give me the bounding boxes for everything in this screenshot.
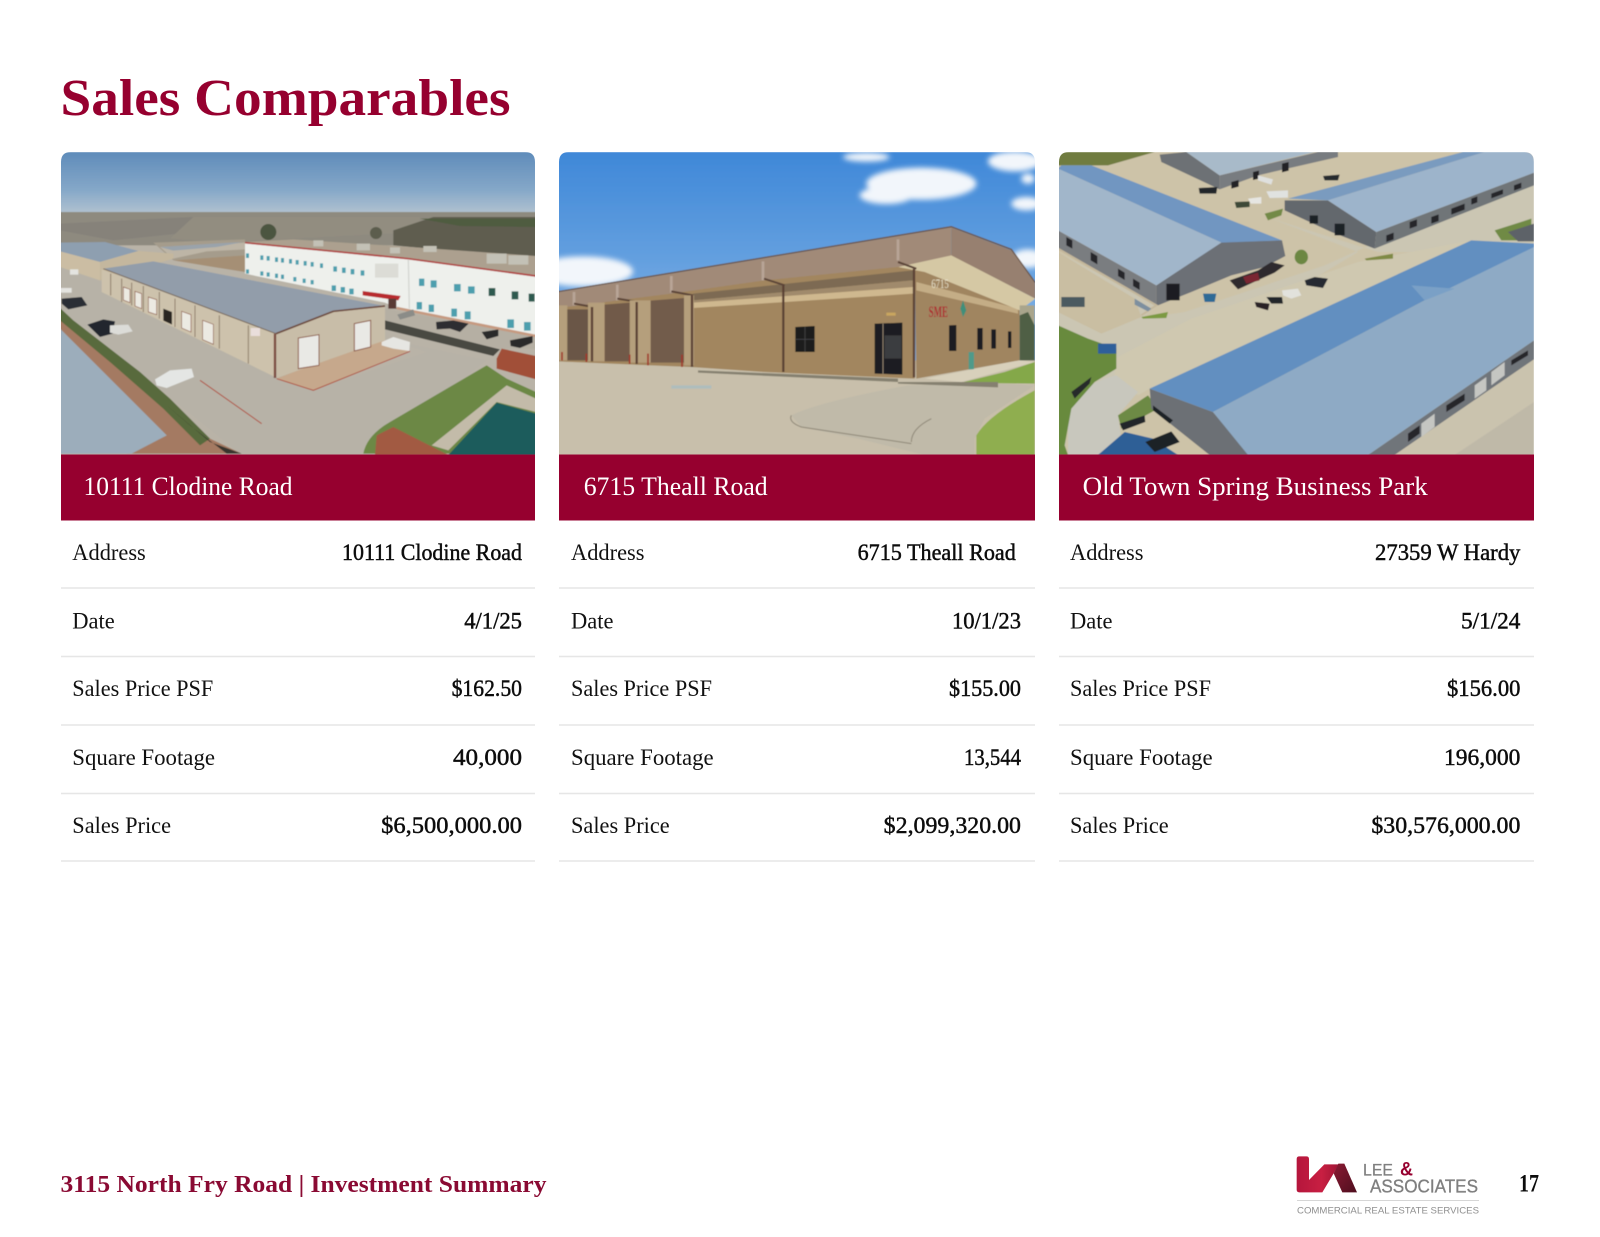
row: address: Address bbox=[1070, 540, 1144, 565]
logo: Lee &amp; Associates bbox=[1297, 1156, 1479, 1216]
parked cars bbox=[1230, 262, 1285, 289]
row: square footage bbox=[61, 745, 535, 794]
row: sales price: $6,500,000.00 bbox=[381, 813, 522, 838]
row: address bbox=[1059, 540, 1534, 588]
pavement bbox=[556, 360, 1036, 455]
logo wordmark: LEE bbox=[1363, 1160, 1393, 1180]
row: date: 10/1/23 bbox=[952, 608, 1021, 633]
panel: comparable 1 bbox=[60, 152, 536, 861]
white building bbox=[245, 239, 536, 276]
row: address: Address bbox=[571, 540, 645, 565]
soffit bbox=[898, 255, 1035, 310]
roof D bbox=[1150, 389, 1250, 455]
row: sales price psf: $155.00 bbox=[949, 676, 1021, 701]
ground bands bbox=[385, 309, 536, 349]
photo: 10111 Clodine Road warehouse aerial bbox=[60, 152, 536, 455]
blue shade and trees bbox=[1098, 432, 1178, 455]
tan pad bbox=[277, 340, 410, 390]
row: sales price: Sales Price bbox=[571, 813, 670, 838]
row: sales price bbox=[559, 813, 1035, 861]
footer title: 3115 North Fry Road | Investment Summary bbox=[60, 1171, 547, 1198]
roof A walls bbox=[1058, 230, 1156, 306]
row: address bbox=[61, 540, 535, 588]
photo: Old Town Spring Business Park aerial bbox=[1058, 152, 1534, 455]
piers and roll doors bbox=[556, 295, 694, 365]
row: sales price: $2,099,320.00 bbox=[884, 813, 1021, 838]
banner: Old Town Spring Business Park bbox=[1059, 454, 1534, 520]
row: sales price psf bbox=[61, 676, 535, 725]
row: sales price: Sales Price bbox=[72, 813, 171, 838]
row: date: Date bbox=[571, 608, 614, 633]
row: sales price psf: $162.50 bbox=[452, 676, 522, 701]
row: square footage: 40,000 bbox=[453, 745, 522, 770]
left background building bbox=[60, 242, 138, 262]
banner: Old Town Spring Business Park: Old Town Spring Business Park bbox=[1083, 472, 1428, 501]
shrubs and islands bbox=[1295, 250, 1308, 264]
main warehouse walls bbox=[102, 269, 275, 377]
row: sales price psf: Sales Price PSF bbox=[1070, 676, 1211, 701]
row: sales price bbox=[61, 813, 535, 861]
row: date bbox=[559, 608, 1035, 656]
row: date: 4/1/25 bbox=[464, 608, 522, 633]
roof A bbox=[1058, 165, 1282, 243]
row: date bbox=[61, 608, 535, 656]
lower left roof, embankment bbox=[60, 308, 242, 454]
row: sales price psf: Sales Price PSF bbox=[571, 676, 712, 701]
page number: 17 bbox=[1519, 1171, 1539, 1198]
row: square footage: Square Footage bbox=[72, 745, 215, 770]
photo: 6715 Theall Road brick warehouse: 6715 bbox=[931, 277, 949, 291]
banner: 6715 Theall Road: 6715 Theall Road bbox=[584, 472, 768, 501]
grass bbox=[1058, 152, 1155, 165]
roof B bbox=[1160, 152, 1220, 189]
banner: 10111 Clodine Road bbox=[61, 454, 535, 520]
row: address: 6715 Theall Road bbox=[858, 540, 1016, 565]
logo wordmark: & bbox=[1400, 1160, 1413, 1180]
row: square footage: 13,544 bbox=[964, 745, 1021, 770]
wall, front bbox=[556, 262, 915, 379]
paved areas bbox=[1059, 186, 1534, 382]
row: address: Address bbox=[72, 540, 146, 565]
row: address: 27359 W Hardy bbox=[1375, 540, 1521, 565]
row: sales price psf bbox=[1059, 676, 1534, 725]
fascia bbox=[556, 227, 951, 308]
sign lettering: SME bbox=[929, 304, 948, 321]
logo wordmark: COMMERCIAL REAL ESTATE SERVICES bbox=[1297, 1206, 1479, 1216]
row: date: Date bbox=[72, 608, 115, 633]
title: Sales Comparables bbox=[60, 70, 510, 127]
row: sales price psf: Sales Price PSF bbox=[72, 676, 213, 701]
row: address bbox=[559, 540, 1035, 588]
row: date: Date bbox=[1070, 608, 1112, 633]
row: sales price: $30,576,000.00 bbox=[1371, 813, 1520, 838]
panel: comparable 3 bbox=[1058, 152, 1534, 861]
windows and door bbox=[795, 326, 815, 352]
row: sales price psf bbox=[559, 676, 1035, 725]
grass bbox=[961, 362, 1035, 384]
roof C bbox=[1285, 200, 1376, 249]
row: sales price: Sales Price bbox=[1070, 813, 1169, 838]
row: sales price bbox=[1059, 813, 1534, 861]
photo: 6715 Theall Road brick warehouse bbox=[533, 151, 1045, 455]
row: date bbox=[1059, 608, 1534, 656]
vehicles bbox=[155, 369, 194, 388]
panel: comparable 2 bbox=[533, 151, 1045, 861]
row: square footage: 196,000 bbox=[1444, 745, 1520, 770]
row: square footage bbox=[559, 745, 1035, 794]
logo wordmark: ASSOCIATES bbox=[1370, 1177, 1478, 1197]
row: sales price psf: $156.00 bbox=[1447, 676, 1520, 701]
logo mark bbox=[1297, 1156, 1357, 1192]
row: date: 5/1/24 bbox=[1461, 608, 1521, 633]
banner: 6715 Theall Road bbox=[559, 454, 1035, 520]
logo wordmark bbox=[1297, 1160, 1479, 1216]
banner: 10111 Clodine Road: 10111 Clodine Road bbox=[84, 472, 292, 501]
row: square footage: Square Footage bbox=[1070, 745, 1213, 770]
row: address: 10111 Clodine Road bbox=[342, 540, 522, 565]
row: square footage bbox=[1059, 745, 1534, 794]
right corner: grass, water, containers bbox=[363, 365, 536, 454]
row: square footage: Square Footage bbox=[571, 745, 714, 770]
